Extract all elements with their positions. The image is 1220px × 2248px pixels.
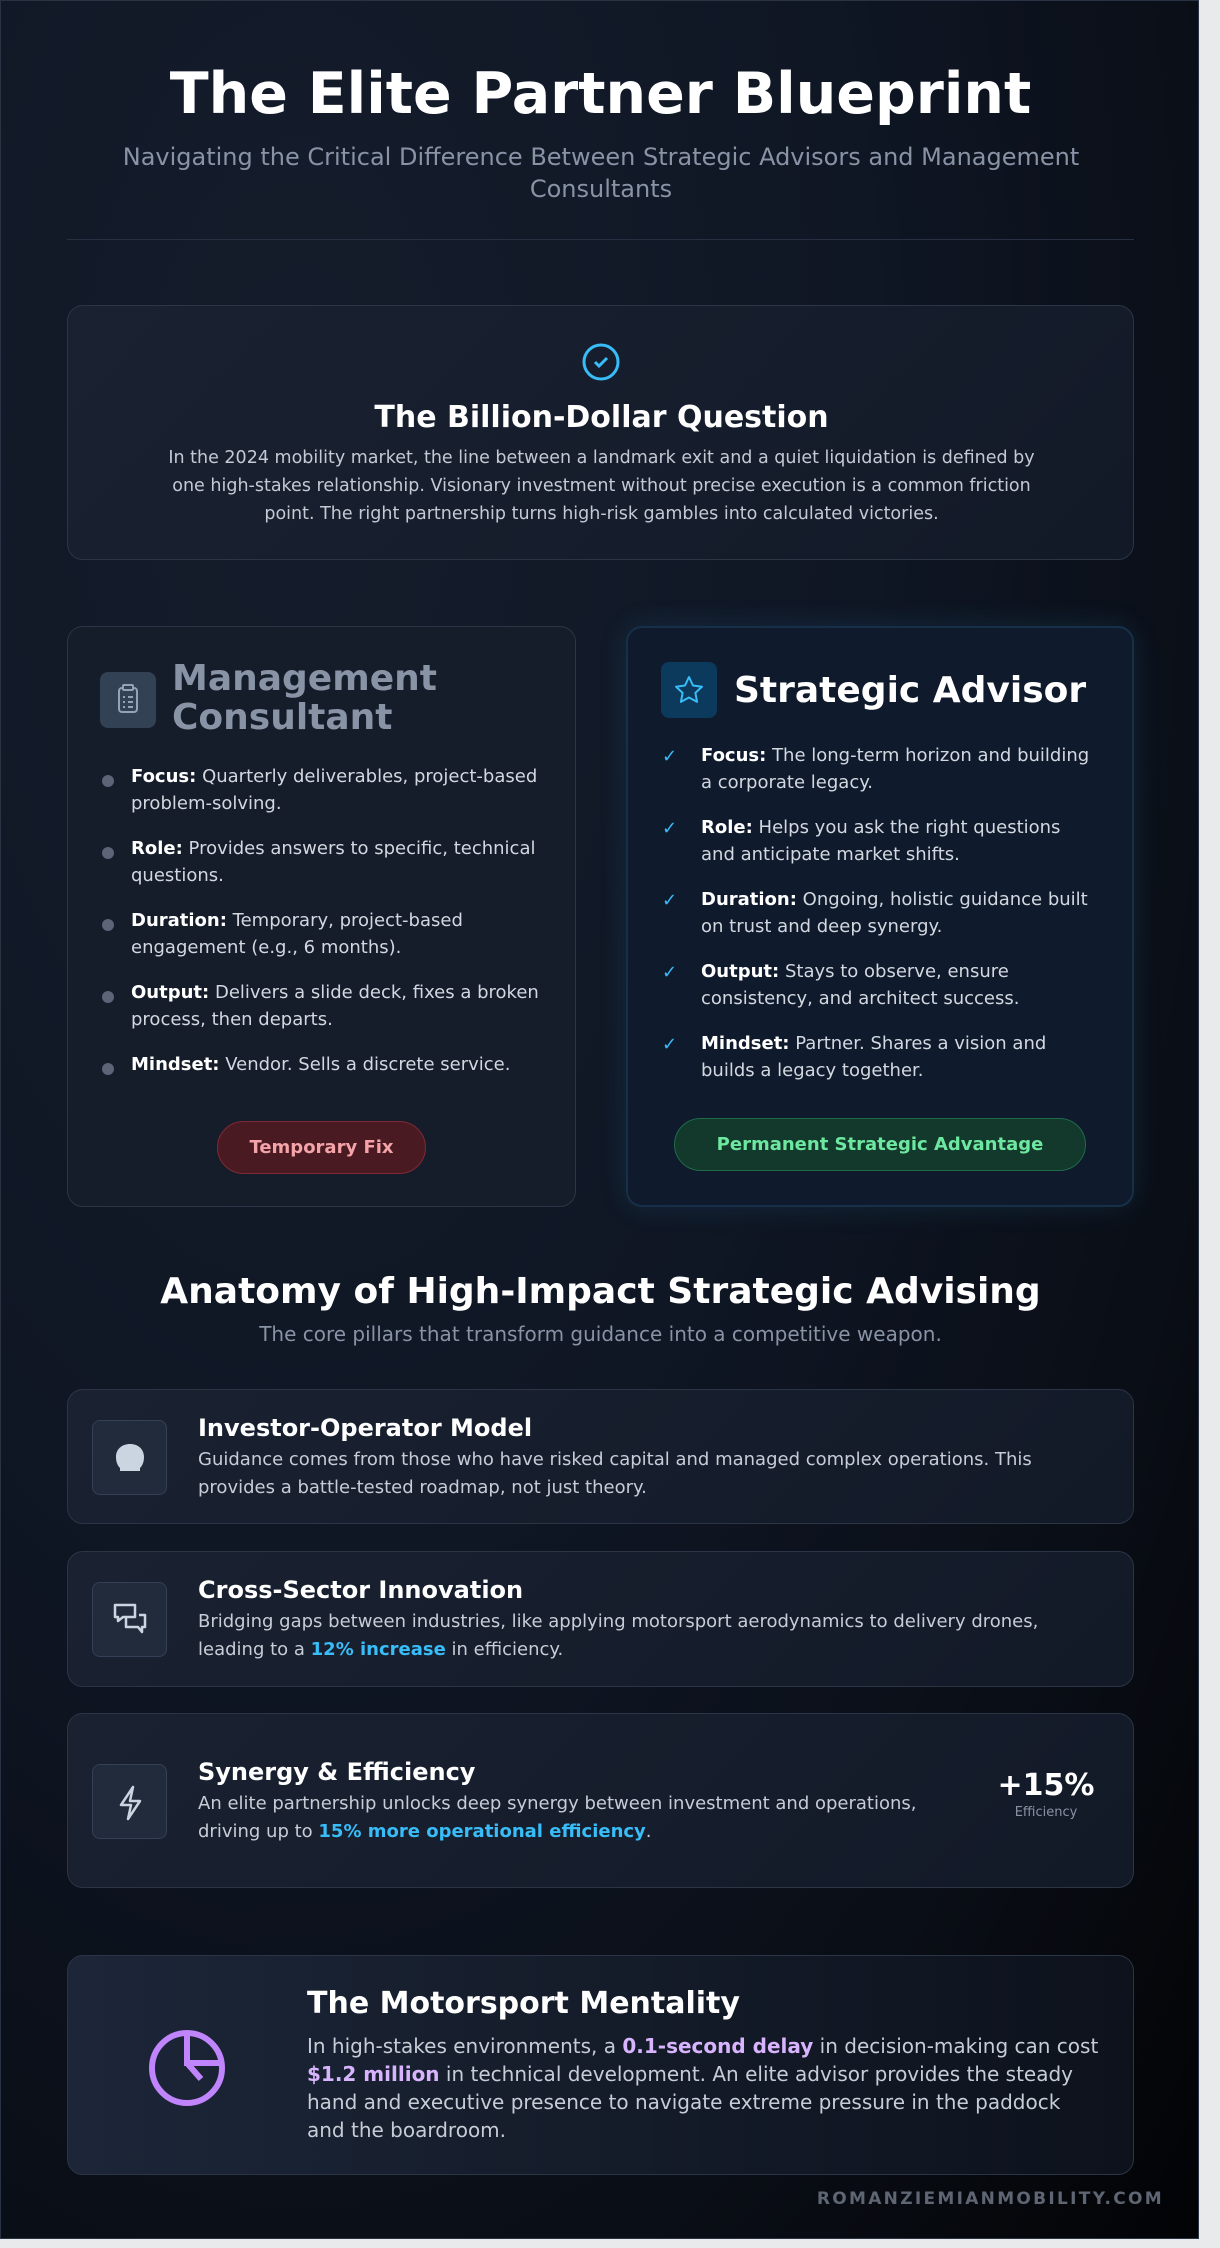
list: ✓ (662, 962, 677, 983)
pill: permanent advantage (674, 1118, 1086, 1171)
heading: Investor-Operator Model (198, 1414, 532, 1442)
text: Bridging gaps between industries, like applying motorsport aerodynamics to delivery drones, leading to a 12% increase in efficiency. (198, 1611, 1038, 1660)
section heading: anatomy: Anatomy of High-Impact Strategic Advising (160, 1271, 1041, 1312)
icon: clipboard (100, 672, 156, 728)
icon: head (92, 1420, 167, 1495)
heading: Synergy & Efficiency (198, 1758, 475, 1786)
list: Focus: Quarterly deliverables, project-based problem-solving. (131, 766, 537, 814)
list (662, 745, 1089, 1081)
heading: Cross-Sector Innovation (198, 1576, 523, 1604)
panel: billion-dollar question (67, 305, 1134, 560)
section subtitle: The core pillars that transform guidance into a competitive weapon. (259, 1322, 942, 1346)
list: Duration: Temporary, project-based engagement (e.g., 6 months). (131, 910, 463, 958)
list (102, 766, 539, 1075)
panel: strategic advisor (626, 626, 1134, 1207)
pill: temporary fix (217, 1121, 426, 1174)
icon: chat (92, 1582, 167, 1657)
list: Output: Delivers a slide deck, fixes a broken process, then departs. (131, 982, 539, 1030)
pill: permanent advantage: Permanent Strategic Advantage (717, 1134, 1043, 1155)
list: ✓ (662, 818, 677, 839)
text: In high-stakes environments, a 0.1-second delay in decision-making can cost $1.2 million in technical development. An elite advisor provides the steady hand and executive presence to navigate extreme pressure in the paddock and the boardroom. (307, 2034, 1098, 2142)
stat: +15% (998, 1768, 1094, 1803)
stat (998, 1768, 1094, 1820)
list: Output: Stays to observe, ensure consistency, and architect success. (701, 961, 1019, 1009)
list: ✓ (662, 746, 677, 767)
card: synergy (67, 1713, 1134, 1888)
icon: clock (149, 2030, 225, 2106)
footer: ROMANZIEMIANMOBILITY.COM (817, 2189, 1164, 2209)
heading: Strategic Advisor (734, 670, 1086, 711)
card: cross-sector (67, 1551, 1134, 1687)
icon: check circle (582, 344, 620, 380)
subtitle: Navigating the Critical Difference Between Strategic Advisors and Management Consultants (123, 143, 1079, 203)
list: Focus: The long-term horizon and building a corporate legacy. (701, 745, 1089, 793)
stat: Efficiency (1015, 1805, 1077, 1820)
card: motorsport mentality (67, 1955, 1134, 2175)
heading: The Motorsport Mentality (307, 1986, 740, 2021)
heading: Management (172, 658, 437, 699)
text: An elite partnership unlocks deep synergy between investment and operations, driving up to 15% more operational efficiency. (198, 1793, 917, 1842)
list: Mindset: Partner. Shares a vision and builds a legacy together. (701, 1033, 1046, 1081)
heading (172, 658, 437, 738)
list: Role: Helps you ask the right questions and anticipate market shifts. (701, 817, 1060, 865)
text: In the 2024 mobility market, the line between a landmark exit and a quiet liquidation is defined by one high-stakes relationship. Visionary investment without precise execution is a common friction point. The right partnership turns high-risk gambles into calculated victories. (168, 448, 1035, 524)
icon: star (661, 662, 717, 718)
heading: Consultant (172, 697, 393, 738)
pill: temporary fix: Temporary Fix (249, 1137, 394, 1158)
list: ✓ (662, 890, 677, 911)
list: ✓ (662, 1034, 677, 1055)
heading: The Billion-Dollar Question (374, 400, 829, 435)
text: Guidance comes from those who have risked capital and managed complex operations. This provides a battle-tested roadmap, not just theory. (198, 1449, 1032, 1498)
title: The Elite Partner Blueprint (170, 61, 1031, 127)
card: investor-operator (67, 1389, 1134, 1524)
icon: bolt (92, 1764, 167, 1839)
list: Duration: Ongoing, holistic guidance built on trust and deep synergy. (701, 889, 1088, 937)
panel: management consultant (67, 626, 576, 1207)
list: Role: Provides answers to specific, technical questions. (131, 838, 535, 886)
list: Mindset: Vendor. Sells a discrete service. (131, 1054, 510, 1075)
